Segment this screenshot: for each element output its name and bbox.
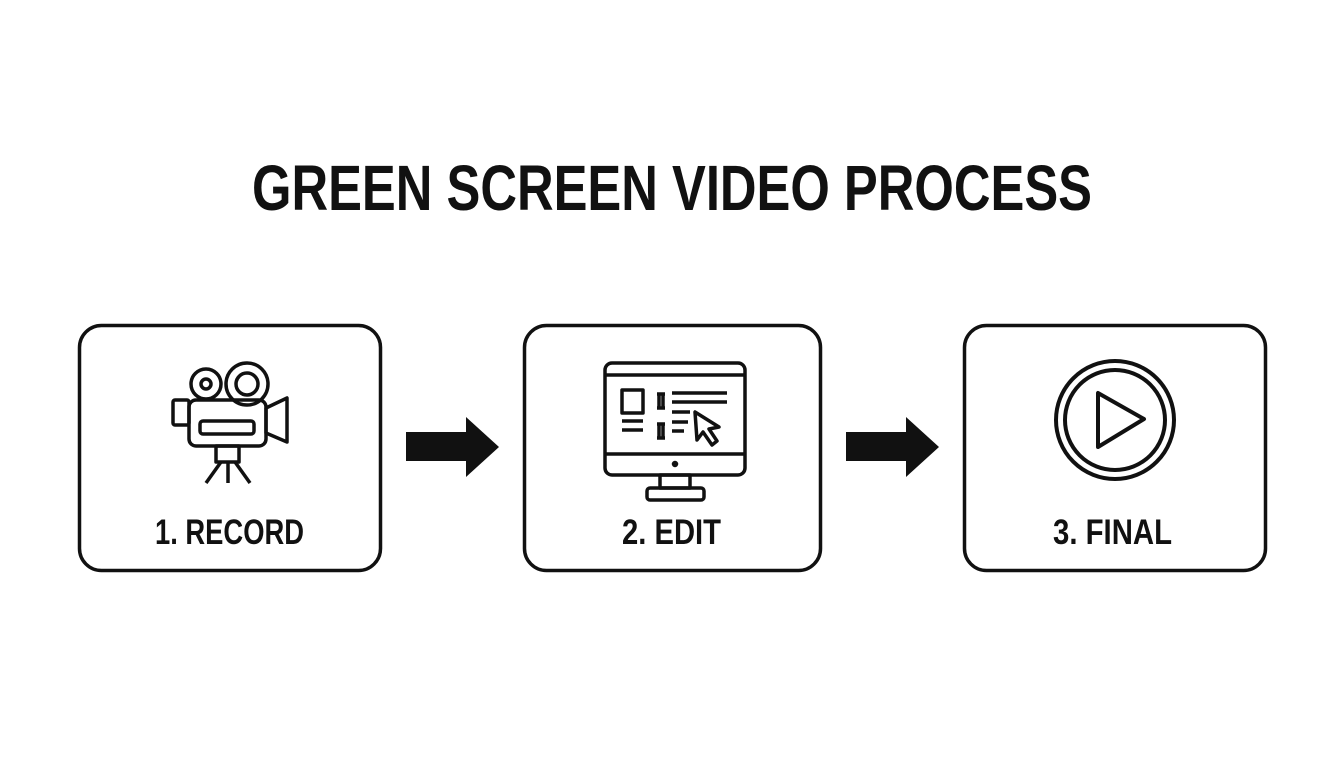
icon: movie camera	[173, 363, 287, 483]
arrow 2	[846, 417, 939, 477]
label: edit: 2. EDIT	[622, 513, 721, 552]
icon: play button	[1056, 361, 1174, 479]
label: final: 3. FINAL	[1053, 513, 1172, 552]
label: record: 1. RECORD	[155, 513, 304, 552]
arrow 1	[406, 417, 499, 477]
panel: record	[80, 326, 380, 570]
panel: edit	[524, 326, 820, 570]
title: GREEN SCREEN VIDEO PROCESS	[252, 152, 1092, 224]
panel: final	[964, 326, 1266, 570]
icon: monitor	[605, 363, 745, 500]
